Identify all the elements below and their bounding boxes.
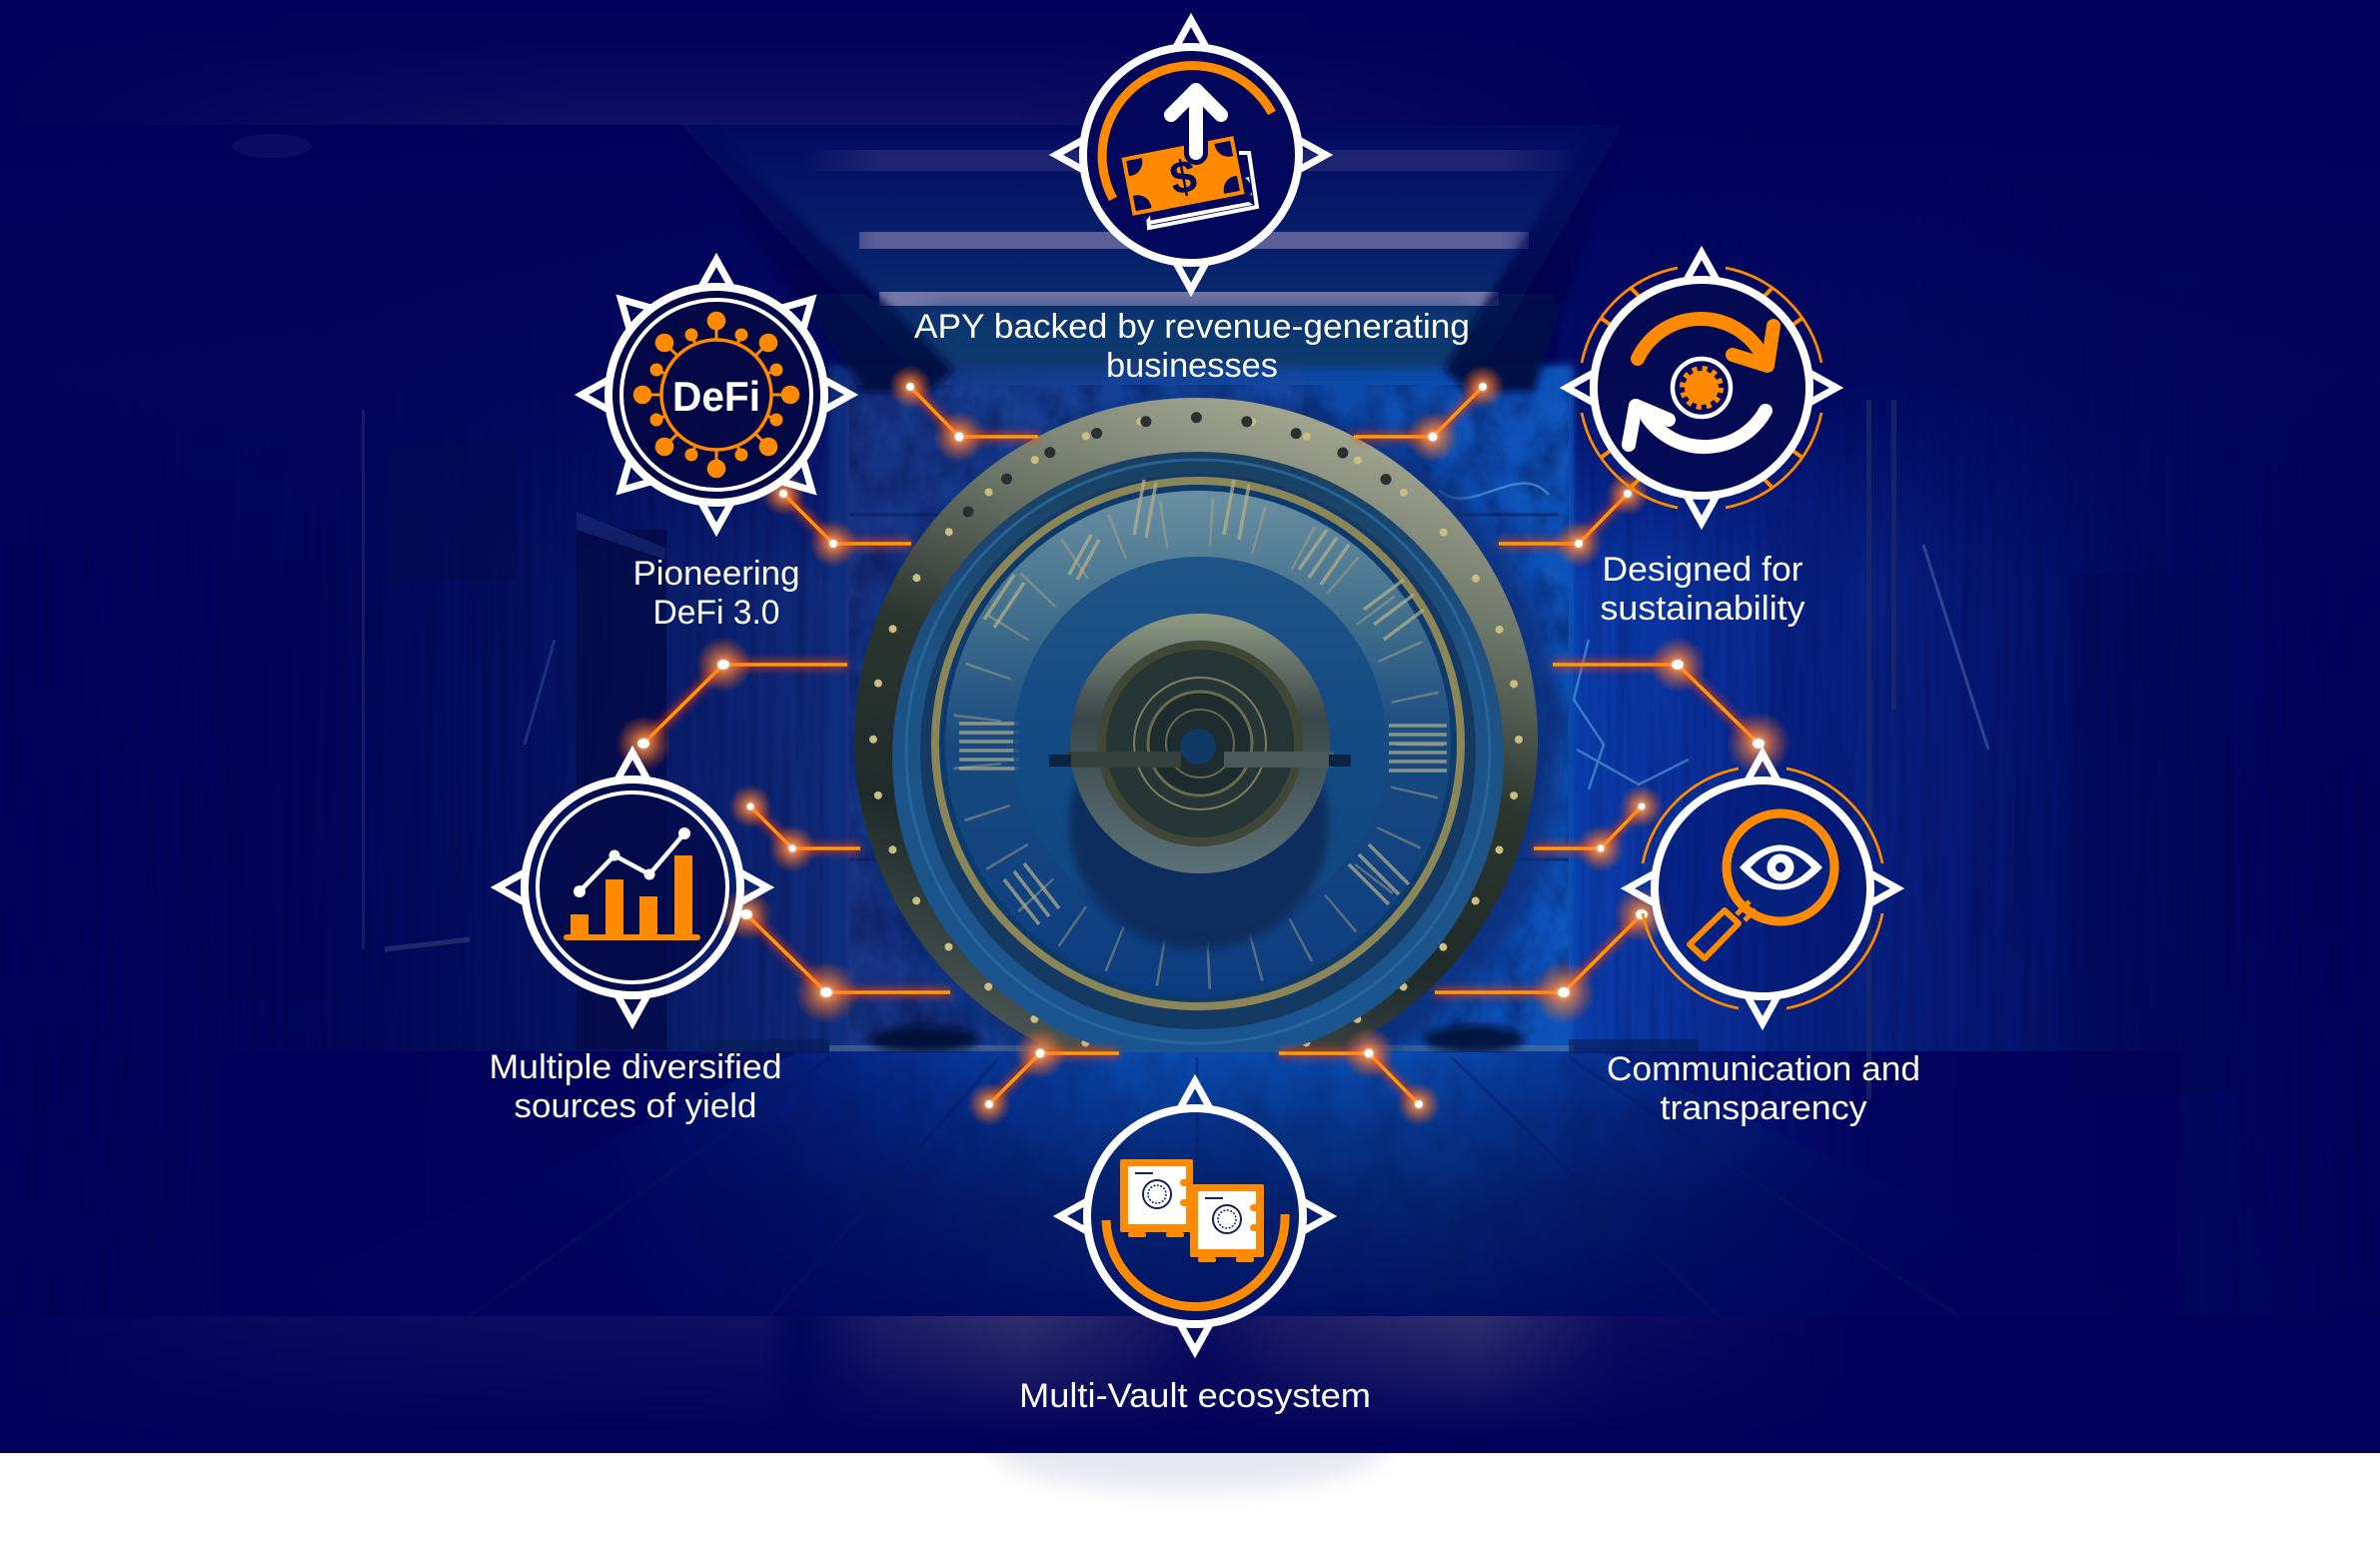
vault shadow <box>859 396 1563 1099</box>
background photo: vault corridor <box>0 125 2380 1316</box>
icon: DeFi network <box>582 260 851 530</box>
gold inner ring <box>935 481 1461 1006</box>
second safe <box>1190 1184 1264 1262</box>
icon: APY money with up arrow: $ <box>1166 149 1201 205</box>
wall seams and scratches <box>1438 482 1689 789</box>
vault door <box>854 396 1563 1099</box>
right wall doors and pipes <box>2069 574 2235 1093</box>
dial ticks <box>976 522 1420 965</box>
vault base shadows <box>869 1025 1524 1053</box>
label: APY backed by revenue-generating businesses: businesses <box>1106 347 1278 385</box>
label: Designed for sustainability: Designed for <box>1603 551 1802 589</box>
roman numeral clusters <box>959 480 1447 924</box>
label: Communication and transparency: Communication and <box>1607 1050 1920 1088</box>
shadow under hub <box>1066 779 1332 953</box>
outer studded ring <box>854 398 1538 1081</box>
hub latch bars <box>1049 752 1351 768</box>
connector nodes <box>637 383 1765 1108</box>
icon: multi-vault safes <box>1060 1081 1330 1351</box>
icon: DeFi network: DeFi <box>672 373 760 420</box>
label: Designed for sustainability: sustainability <box>1601 590 1804 628</box>
label: Pioneering DeFi 3.0: Pioneering <box>633 555 799 593</box>
left wall doors and vent <box>217 561 344 1000</box>
bottom reflection band <box>230 1316 1698 1418</box>
icon: magnifier with eye <box>1628 754 1897 1023</box>
icon: sustainability cycle <box>1567 253 1836 523</box>
connector strokes <box>643 387 1759 1104</box>
connector glow spots <box>615 365 1790 1126</box>
label: Multiple diversified sources of yield: Multiple diversified <box>490 1048 781 1086</box>
top reflection band <box>0 0 2380 125</box>
label: Multi-Vault ecosystem: Multi-Vault ecosystem <box>1019 1377 1371 1415</box>
central hub <box>1070 614 1330 873</box>
floor seams <box>470 1057 1958 1316</box>
first safe <box>1120 1159 1193 1237</box>
dial face <box>945 491 1451 996</box>
icon: bar chart with trend line <box>498 753 767 1022</box>
inner dial disc <box>1013 557 1386 771</box>
blue steel ring <box>892 452 1504 1063</box>
glowing connector lines <box>615 365 1790 1126</box>
label: Pioneering DeFi 3.0: DeFi 3.0 <box>653 594 779 632</box>
icon: APY money with up arrow <box>1056 20 1326 290</box>
connector glow <box>643 387 1759 1104</box>
label: Multiple diversified sources of yield: sources of yield <box>514 1087 757 1125</box>
label: Communication and transparency: transparency <box>1661 1089 1866 1127</box>
label: APY backed by revenue-generating businesses: APY backed by revenue-generating <box>914 308 1470 346</box>
dark ceiling beams <box>733 181 956 396</box>
rivets <box>873 417 1519 1062</box>
ceiling light stripes <box>799 150 1579 306</box>
